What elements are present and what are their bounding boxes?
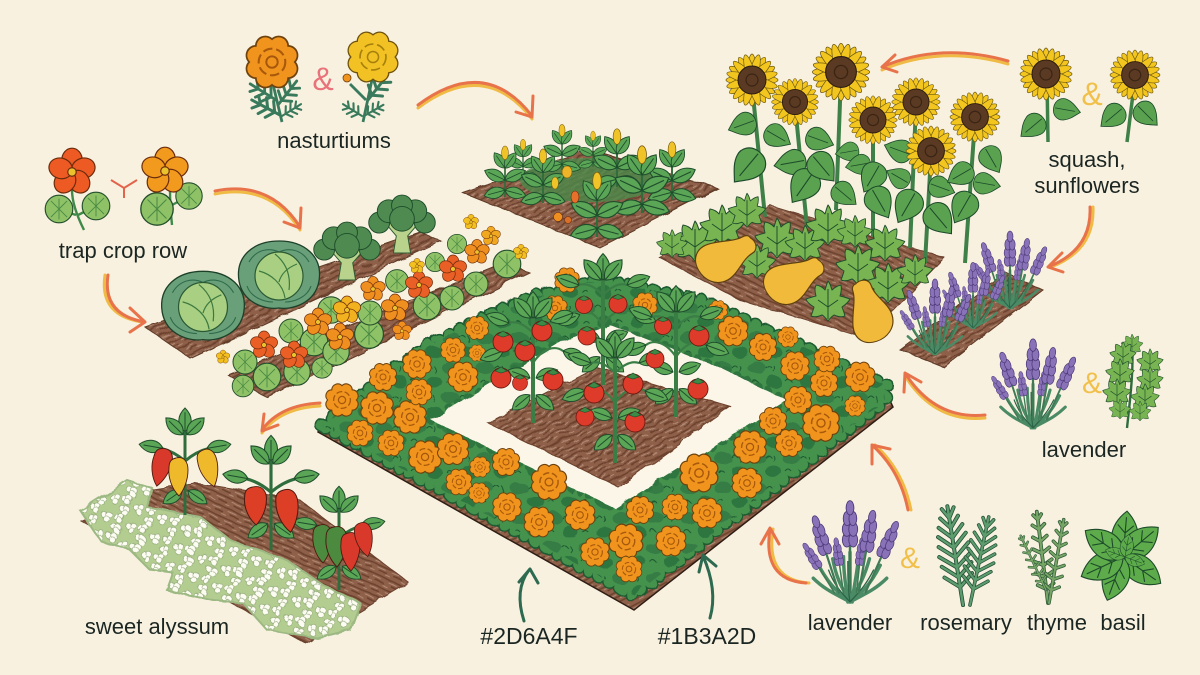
labels: herbs: lavender [808,610,892,635]
label: colour 1B3A2D: #1B3A2D [658,623,756,649]
panel: pepper and alyssum bed [80,408,408,643]
arrow: marigold bed to peppers [262,403,320,433]
icon: rosemary [932,504,1003,608]
tomato plants [478,254,731,463]
labels: herbs: rosemary [920,610,1012,635]
nasturtium flowers [215,214,529,370]
icon: lavender and herb [989,334,1163,428]
labels: herbs: thyme [1027,610,1087,635]
icon: lavender [799,501,903,602]
soil border [318,392,893,610]
plants: nasturtium seedlings [482,124,698,242]
arrow: herbs to marigold bed [872,445,911,510]
arrow: sunflowers to bed [882,53,1008,72]
broccoli [314,195,435,280]
panel: central marigold border bed [318,254,893,610]
arrow: lavender to bed corner [761,528,809,583]
inner soil plot [488,367,731,487]
icon: sunflower pair [1014,48,1165,145]
cabbages [162,241,320,340]
panel: squash and sunflower bed [657,43,1009,347]
arrow: green 1B3A2D [699,555,716,618]
icon: nasturtium pair [45,147,202,230]
label: trap crop row: trap crop row [59,238,187,263]
separator glyph [111,180,137,198]
label: lavender: lavender [1042,437,1126,462]
arrow: green 2D6A4F [519,569,538,621]
label: squash, sunflowers [1034,147,1140,198]
arrows [104,53,1093,621]
panel: top centre companion bed [463,124,718,248]
panel: brassica row [145,195,441,358]
arrow: squash to lavender bed [1048,207,1093,272]
squash plants [657,193,933,347]
nasturtium leaves [232,234,521,397]
sweet alyssum carpet [80,480,360,638]
panel: lavender bed [898,231,1050,367]
panel: nasturtium trap crop row [215,214,529,398]
icon row: lavender rosemary thyme basil [799,501,1168,608]
arrow: marigolds to top bed [418,82,533,119]
labels: herbs [808,610,1146,635]
label: sweet alyssum: sweet alyssum [85,614,229,639]
hedge ring [322,280,886,595]
label: squash, sunflowers: squash, [1048,147,1126,172]
pepper plants [138,408,386,590]
icon: thyme [1015,511,1072,604]
ampersand: & [312,61,334,97]
labels: herbs: basil [1100,610,1146,635]
icon: basil [1076,510,1168,605]
label: squash, sunflowers: sunflowers [1034,173,1140,198]
sunflowers [723,43,1009,263]
ampersand: & [1082,367,1102,400]
icon: marigolds orange and yellow [246,32,398,123]
arrow: lavender to lavender bed [904,373,985,418]
ampersand: & [900,542,920,575]
label: nasturtiums: nasturtiums [277,128,391,153]
arrow: label to cabbage row [104,275,145,332]
arrow: nasturtium to brassicas [215,189,301,230]
ampersand: & [1081,76,1103,112]
label: colour 2D6A4F: #2D6A4F [480,623,578,649]
marigolds [326,268,875,582]
